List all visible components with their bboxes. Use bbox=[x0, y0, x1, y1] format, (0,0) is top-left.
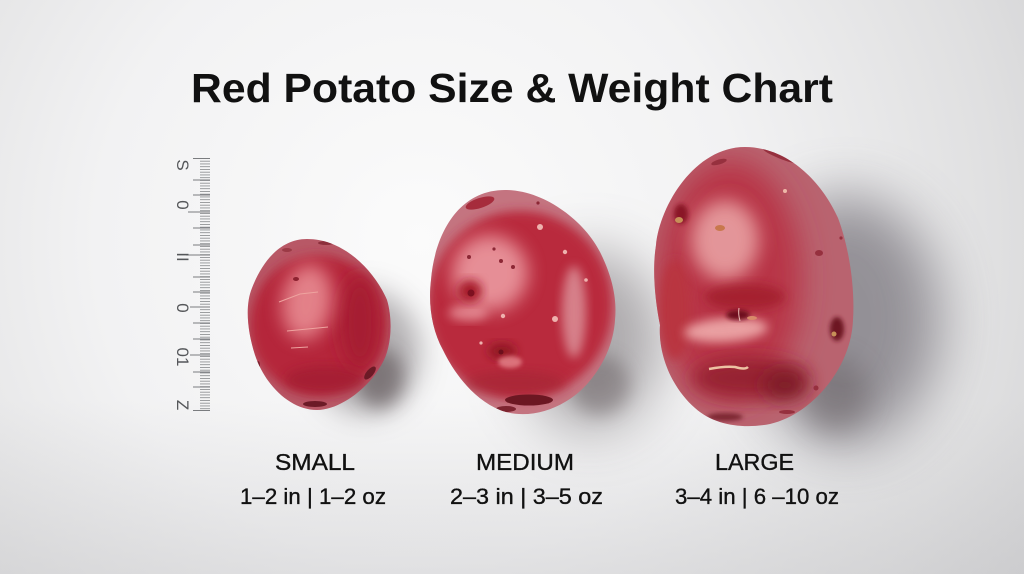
ruler bbox=[173, 158, 210, 411]
dimples bbox=[726, 310, 750, 320]
title: Red Potato Size & Weight Chart bbox=[191, 65, 833, 111]
highlight bbox=[452, 235, 528, 311]
label: medium: 2–3 in | 3–5 oz bbox=[450, 484, 603, 509]
ruler numerals bbox=[173, 159, 192, 410]
ruler numerals: 0 bbox=[173, 200, 192, 210]
ruler numerals: Z bbox=[173, 400, 192, 410]
highlights bbox=[691, 200, 759, 280]
label: small: SMALL bbox=[275, 449, 355, 475]
small potato bbox=[248, 239, 391, 410]
ruler numerals: 01 bbox=[173, 348, 192, 366]
ruler numerals: S bbox=[173, 159, 192, 171]
label: large bbox=[675, 449, 839, 509]
highlight bbox=[277, 261, 337, 343]
large potato bbox=[654, 147, 854, 426]
medium potato bbox=[430, 190, 616, 414]
ruler numerals: II bbox=[173, 252, 192, 262]
ruler numerals: 0 bbox=[173, 303, 192, 313]
potato shadows bbox=[310, 195, 940, 445]
label: large: LARGE bbox=[715, 449, 794, 475]
label: medium bbox=[450, 449, 603, 509]
label: large: 3–4 in | 6 –10 oz bbox=[675, 484, 839, 509]
label: small: 1–2 in | 1–2 oz bbox=[240, 484, 386, 509]
dimples bbox=[448, 305, 488, 321]
label: medium: MEDIUM bbox=[476, 449, 574, 475]
label: small bbox=[240, 449, 386, 509]
